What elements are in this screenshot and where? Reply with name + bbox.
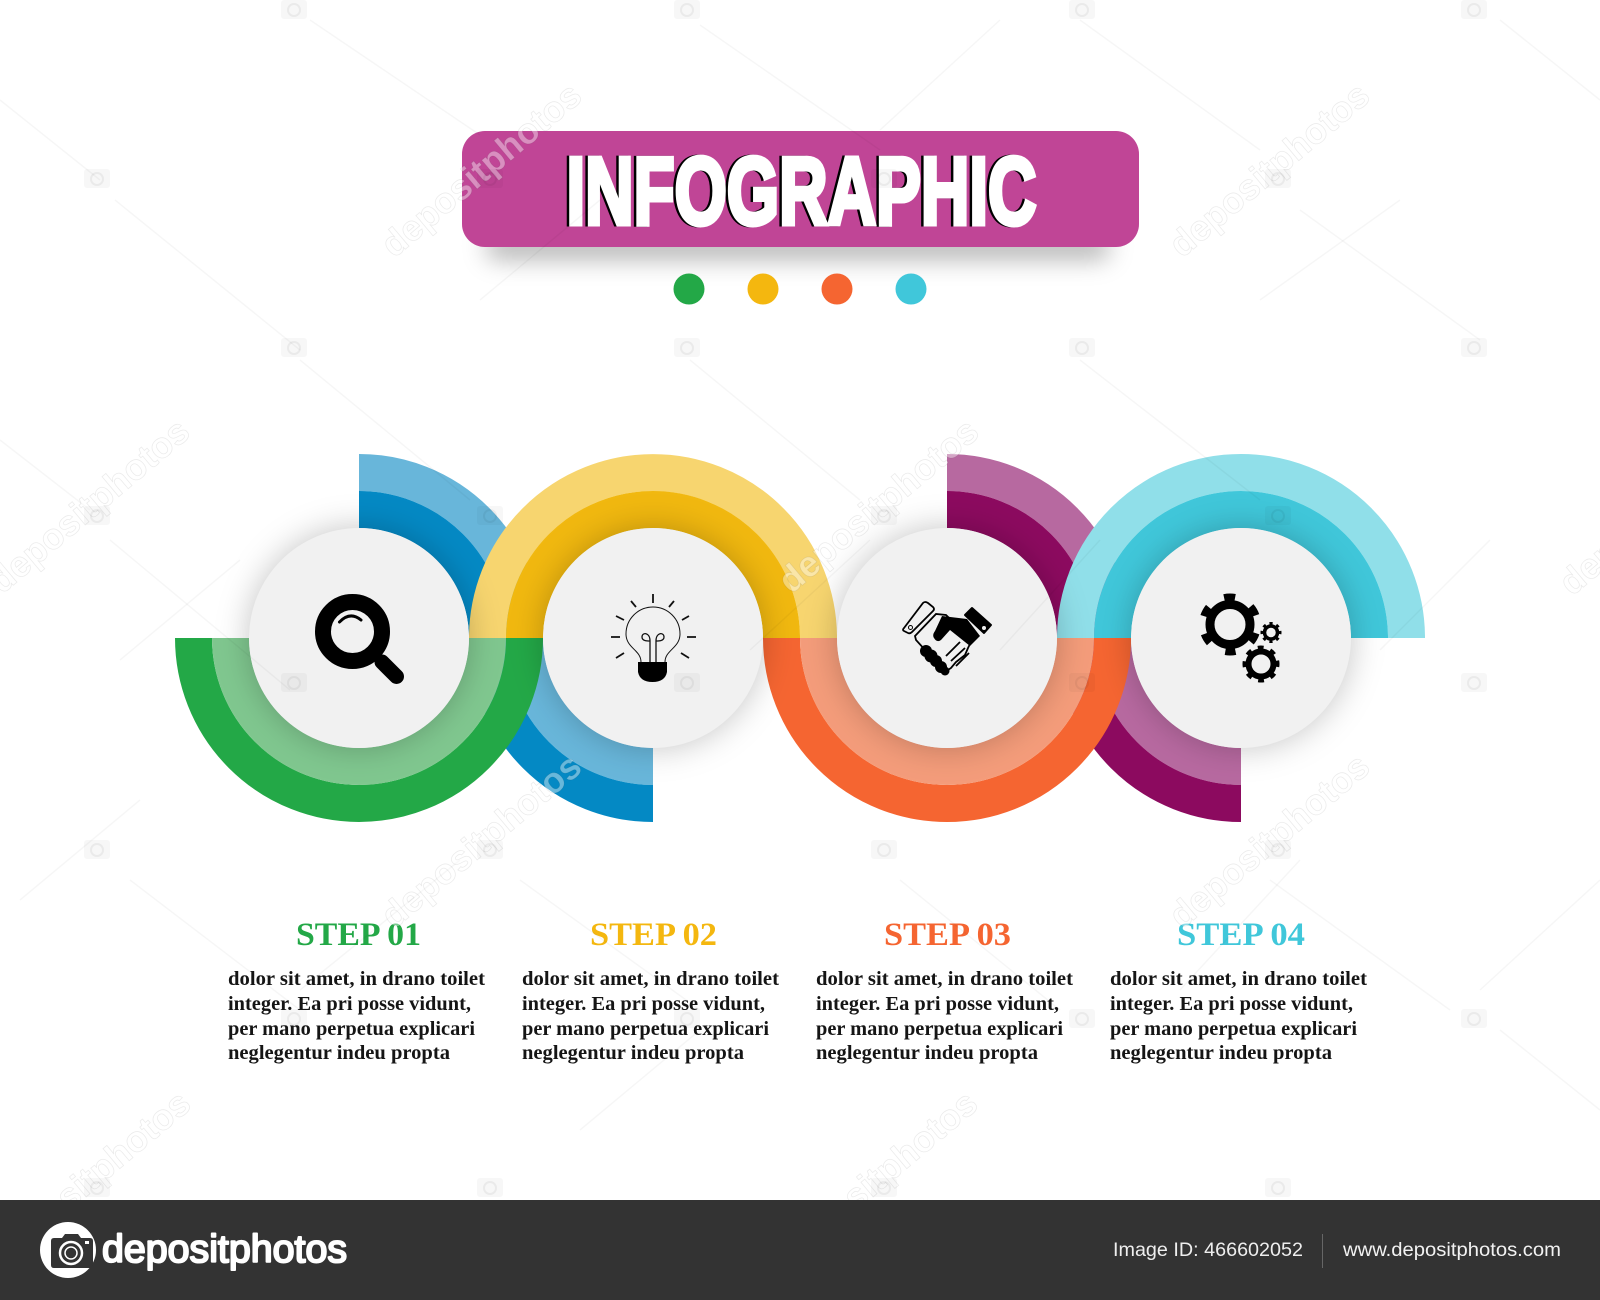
- title banner: [462, 131, 1139, 247]
- body: step 04: neglegentur indeu propta: [1110, 1042, 1332, 1064]
- watermark: depositphotos: [1161, 745, 1377, 936]
- arc: blue lower quarter: [488, 638, 653, 804]
- arc: cyan half ring: [1076, 473, 1406, 638]
- arc: purple upper quarter: [947, 472, 1112, 638]
- body: step 04: [1110, 968, 1367, 1064]
- body: step 04: dolor sit amet, in drano toilet: [1110, 968, 1367, 990]
- logo text: depositphotos: [102, 1228, 347, 1271]
- text block: step 01: [228, 917, 485, 1064]
- body: step 03: integer. Ea pri posse vidunt,: [816, 993, 1059, 1015]
- body: step 03: [816, 968, 1073, 1064]
- body: step 03: dolor sit amet, in drano toilet: [816, 968, 1073, 990]
- icon: gears: [1204, 598, 1280, 680]
- arc: blue upper quarter: [359, 472, 524, 638]
- text block: step 04: [1110, 917, 1367, 1064]
- body: step 01: [228, 968, 485, 1064]
- title: INFOGRAPHIC: [564, 138, 1034, 245]
- body: step 01: neglegentur indeu propta: [228, 1042, 450, 1064]
- icon: light bulb: [611, 594, 696, 682]
- body: step 04: per mano perpetua explicari: [1110, 1018, 1357, 1040]
- body: step 04: integer. Ea pri posse vidunt,: [1110, 993, 1353, 1015]
- panel: step 3 circle with handshake icon: [837, 528, 1057, 748]
- body: step 01: integer. Ea pri posse vidunt,: [228, 993, 471, 1015]
- body: step 02: [522, 968, 779, 1064]
- icon: camera logo: [40, 1222, 96, 1278]
- body: step 03: per mano perpetua explicari: [816, 1018, 1063, 1040]
- panel: step 2 circle with light bulb icon: [543, 528, 763, 748]
- watermark: depositphotos: [770, 410, 986, 601]
- body: step 02: per mano perpetua explicari: [522, 1018, 769, 1040]
- body: step 01: dolor sit amet, in drano toilet: [228, 968, 485, 990]
- body: step 01: per mano perpetua explicari: [228, 1018, 475, 1040]
- arc: green half ring: [194, 638, 524, 803]
- watermark: depositphotos: [373, 74, 589, 265]
- heading: step 02: STEP 02: [590, 917, 717, 953]
- text block: step 03: [816, 917, 1073, 1064]
- panel: step 1 circle with magnifier icon: [249, 528, 469, 748]
- text block: step 02: [522, 917, 779, 1064]
- heading: step 01: STEP 01: [296, 917, 421, 953]
- arc: orange half ring: [782, 638, 1112, 804]
- body: step 02: dolor sit amet, in drano toilet: [522, 968, 779, 990]
- footer bar: [0, 1200, 1600, 1300]
- image id: Image ID: 466602052: [1113, 1239, 1303, 1261]
- watermark: depositphotos: [373, 745, 589, 936]
- banner shadow: [486, 232, 1110, 260]
- arc: yellow half ring: [488, 473, 818, 638]
- title: INFOGRAPHIC: [566, 138, 1036, 245]
- heading: step 04: STEP 04: [1177, 917, 1305, 953]
- icon: handshake: [903, 602, 991, 676]
- body: step 03: neglegentur indeu propta: [816, 1042, 1038, 1064]
- panel: step 4 circle with gears icon: [1131, 528, 1351, 748]
- watermark: depositphotos: [1161, 74, 1377, 265]
- body: step 02: integer. Ea pri posse vidunt,: [522, 993, 765, 1015]
- icon: magnifying glass: [323, 602, 396, 676]
- body: step 02: neglegentur indeu propta: [522, 1042, 744, 1064]
- watermark: depositphotos: [769, 1082, 985, 1273]
- colour dots: [674, 274, 926, 304]
- website url: www.depositphotos.com: [1342, 1239, 1561, 1261]
- circle shadows: [248, 527, 1352, 749]
- heading: step 03: STEP 03: [884, 917, 1011, 953]
- arc: purple lower quarter: [1076, 638, 1241, 804]
